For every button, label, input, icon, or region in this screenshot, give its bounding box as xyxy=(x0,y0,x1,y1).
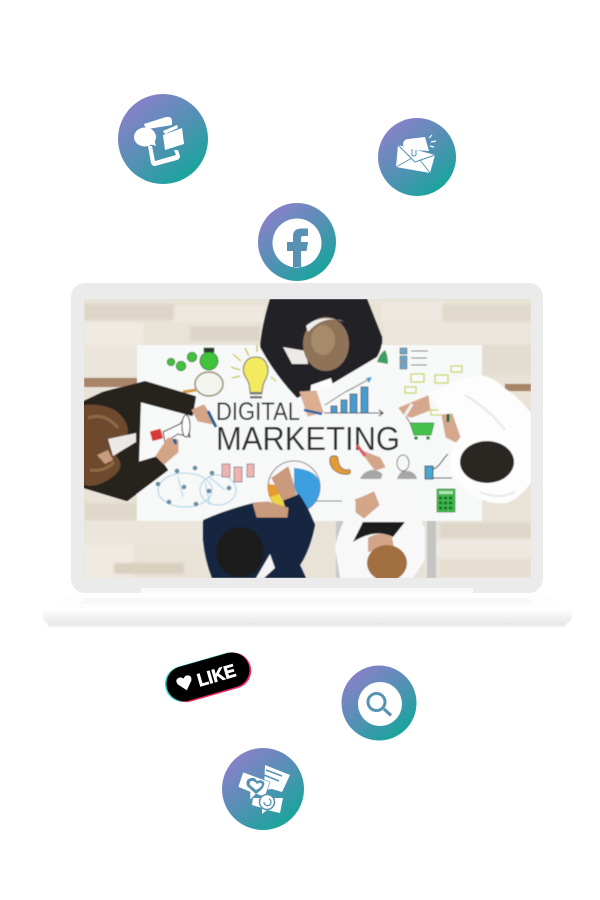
collar xyxy=(306,318,345,332)
glyph f xyxy=(287,228,308,267)
drawing: envelopes xyxy=(405,366,462,415)
skin xyxy=(368,534,394,552)
red edge xyxy=(164,648,256,706)
person: man at top xyxy=(260,299,382,416)
hands xyxy=(253,467,296,517)
glyph disc xyxy=(358,682,402,726)
blue marker xyxy=(174,411,216,444)
message lines xyxy=(264,770,282,781)
badge circle xyxy=(378,118,456,196)
reaction circle xyxy=(260,794,274,810)
shirt xyxy=(430,375,531,503)
top message xyxy=(264,765,290,792)
hair xyxy=(460,441,514,483)
icon: envelope with megaphone xyxy=(378,118,456,196)
white table sheet xyxy=(137,345,482,521)
laptop xyxy=(43,283,572,626)
laptop front edge xyxy=(43,611,572,624)
drawing: megaphone xyxy=(150,415,190,442)
drawing: lower bar chart xyxy=(316,498,358,502)
icon: facebook xyxy=(258,203,336,281)
infographic scene xyxy=(43,94,572,830)
heading text: digital marketing: DIGITAL xyxy=(216,398,300,426)
jacket xyxy=(84,382,195,500)
drawing: thumbs up xyxy=(425,454,452,479)
icon: search xyxy=(342,666,416,740)
sleeve cuffs xyxy=(310,378,333,395)
person: man at bottom left xyxy=(203,467,315,578)
table edges and chair frame xyxy=(84,378,531,578)
laptop shadow xyxy=(48,623,566,626)
heart xyxy=(246,778,264,794)
drawing: calculator xyxy=(437,489,455,512)
hands xyxy=(156,405,213,464)
drawing: telephone xyxy=(330,456,350,474)
marker xyxy=(357,445,365,456)
drawing: wifi arcs xyxy=(377,350,388,364)
drawing: pie chart xyxy=(268,461,320,513)
hair highlight xyxy=(311,325,335,355)
laptop lid xyxy=(71,283,543,593)
megaphone xyxy=(403,137,429,156)
markers xyxy=(404,404,412,417)
white shirt xyxy=(335,467,425,578)
glyph disc xyxy=(272,218,322,268)
jacket xyxy=(260,299,382,398)
shirt xyxy=(283,347,308,364)
envelope xyxy=(396,145,435,173)
heart message xyxy=(238,772,270,800)
photo: digital marketing team xyxy=(80,295,535,582)
laptop hinge xyxy=(141,588,473,594)
wood floor xyxy=(80,295,535,582)
hands xyxy=(356,450,385,518)
laptop keyboard xyxy=(80,598,534,604)
hair xyxy=(84,405,128,486)
laptop keyboard deck xyxy=(48,593,566,611)
drawing: money bags xyxy=(167,348,218,371)
shirt shading xyxy=(465,395,515,496)
drawing: magnifier xyxy=(183,372,223,396)
marker xyxy=(304,410,322,414)
hair xyxy=(367,545,407,581)
magnifier xyxy=(368,694,391,716)
shirt xyxy=(256,554,275,578)
hair highlights xyxy=(88,416,118,470)
bottom message xyxy=(252,798,283,814)
black pill xyxy=(162,648,254,705)
drawing: business people xyxy=(360,455,417,479)
envelope flaps xyxy=(396,145,435,173)
navy jacket xyxy=(203,494,315,578)
badge circle xyxy=(342,666,416,740)
drawing: light bulb xyxy=(231,345,276,398)
badge circle xyxy=(222,748,304,830)
heart xyxy=(176,674,194,692)
collar xyxy=(108,433,136,456)
label: LIKE xyxy=(195,660,238,690)
hair xyxy=(303,317,349,371)
badge circle xyxy=(258,203,336,281)
hair xyxy=(216,527,264,577)
drawing: checklist xyxy=(400,348,428,369)
glyph xyxy=(134,117,184,166)
icon: social messages xyxy=(222,748,304,830)
drawing: price tags xyxy=(222,464,254,482)
badge circle xyxy=(118,94,208,184)
person: man at right xyxy=(399,375,531,503)
sound rays xyxy=(429,135,436,147)
person: woman at bottom right xyxy=(335,445,425,581)
sticker: like xyxy=(161,647,256,707)
icon: chat and phone exchange xyxy=(118,94,208,184)
heading text: digital marketing xyxy=(217,402,398,451)
cyan edge xyxy=(161,648,252,706)
hand xyxy=(300,391,323,416)
drawing: growth bar chart xyxy=(324,377,383,416)
heading text: digital marketing: MARKETING xyxy=(216,420,400,457)
drawing: people network xyxy=(156,466,236,507)
hands xyxy=(399,396,460,442)
drawing: shopping cart xyxy=(404,414,434,440)
person: woman at left xyxy=(84,382,216,500)
dark collar xyxy=(353,522,405,542)
skin xyxy=(97,450,113,464)
